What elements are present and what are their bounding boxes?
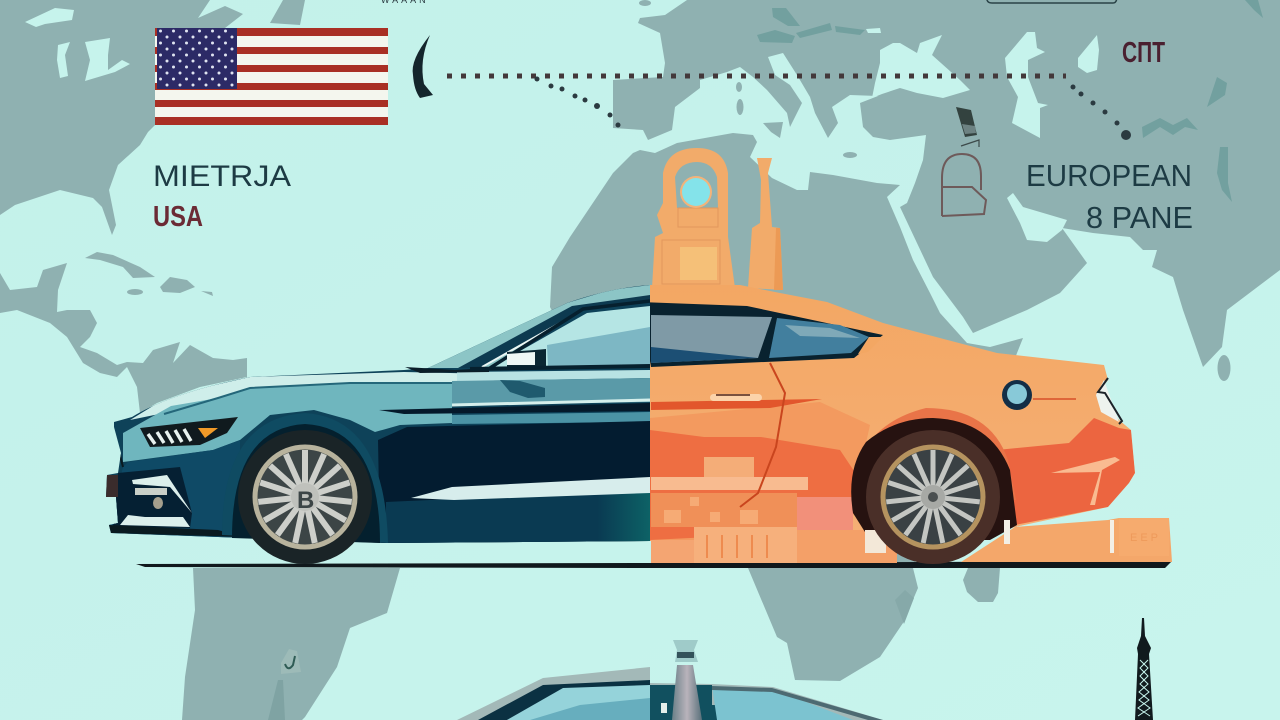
front bumper — [105, 440, 240, 540]
fender panel — [123, 383, 452, 462]
door character stripe — [379, 403, 650, 414]
lower car left window — [507, 685, 650, 720]
car body: orange European half — [650, 285, 1135, 563]
lower side panel — [650, 402, 870, 545]
lower car centre pillar — [650, 685, 717, 720]
car: main split illustration — [100, 280, 1172, 570]
side sill highlight — [411, 477, 650, 500]
rear quarter window — [769, 318, 869, 358]
horizontal route — [447, 74, 1066, 78]
top fragments — [381, 0, 1117, 5]
rear highlights — [1051, 457, 1120, 505]
side mirror — [500, 349, 546, 398]
landmass: Africa — [550, 133, 1023, 681]
white block near rear wheel — [865, 530, 886, 553]
Caribbean islands — [85, 252, 213, 296]
lower car roof — [457, 667, 883, 720]
label: pane: 8 PANE — [1086, 200, 1193, 235]
rear diffuser — [1015, 526, 1020, 527]
flag of the USA — [155, 28, 388, 125]
orange landmarks — [652, 148, 783, 290]
windshield dark band — [458, 295, 650, 368]
bottom right city blocks: EEP — [1130, 532, 1161, 544]
cowl trim — [405, 367, 489, 373]
door handle — [710, 394, 762, 401]
icon: landmark outline — [942, 154, 986, 216]
rear wheel — [866, 430, 1000, 564]
headlight — [140, 417, 238, 447]
rear red panel — [997, 418, 1135, 525]
rear wheel arch — [876, 408, 1016, 500]
label: top-right code: CПT — [1122, 37, 1165, 69]
upper door panels — [457, 370, 650, 381]
second car: lower cropped illustration — [457, 640, 883, 720]
ground line — [136, 561, 1172, 568]
lower car windshield band — [478, 680, 650, 720]
label: America: MIETRJA — [153, 160, 291, 193]
lower red panel — [650, 430, 860, 540]
landmark: arch gate — [652, 148, 735, 288]
hood stripe — [130, 372, 496, 420]
label: European: EUROPEAN — [1026, 158, 1192, 193]
bottom right city blocks — [961, 518, 1172, 562]
icon: small map marker — [281, 649, 301, 674]
side window — [492, 306, 650, 367]
front wheel — [238, 430, 372, 564]
crescent mark — [413, 35, 433, 98]
rear side window — [651, 315, 772, 363]
landmass: South America — [182, 568, 400, 720]
cropped top box — [987, 0, 1117, 3]
islands — [639, 0, 1230, 381]
Eiffel tower — [1135, 618, 1153, 720]
dotted route lines — [447, 76, 1131, 140]
tail light — [1096, 378, 1122, 424]
window frame — [640, 302, 883, 367]
branch to Asia — [1070, 84, 1131, 140]
front wheel: B — [297, 487, 314, 514]
red stripe — [651, 399, 822, 410]
windshield — [428, 285, 650, 368]
fuel cap — [1002, 380, 1032, 410]
lower car right window — [712, 686, 853, 720]
landmass: Central America — [0, 263, 247, 413]
inland seas — [866, 28, 1099, 242]
branch to Atlantic — [534, 76, 620, 128]
front wheel arch — [222, 413, 388, 543]
city block silhouette — [651, 457, 897, 563]
icon: small tower — [956, 107, 979, 147]
landmass: North America — [0, 0, 305, 235]
label: USA: USA — [153, 201, 203, 233]
door seam — [740, 363, 785, 507]
landmark: minaret tower — [748, 158, 783, 290]
darker lakes — [757, 0, 1263, 202]
landmass: Eurasia — [613, 0, 1280, 367]
car body: dark American half — [106, 285, 650, 543]
tower in front of car — [672, 640, 702, 720]
front grille highlights — [132, 475, 192, 513]
lower door panel — [378, 421, 650, 545]
